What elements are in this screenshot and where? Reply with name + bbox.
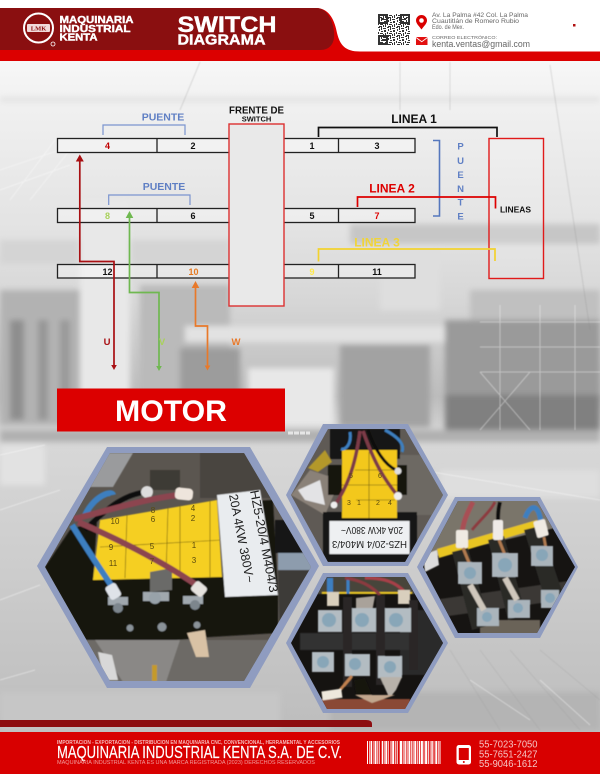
terminal numbers: 6	[190, 211, 196, 221]
label on switch: 20A 4KW 380V~	[226, 493, 257, 584]
company name: MAQUINARIA	[60, 15, 134, 26]
label on switch: HZ5-20/4 M404/3	[247, 489, 281, 594]
photo hexagon: terminals front view	[286, 573, 448, 713]
terminal row 2	[58, 208, 415, 222]
photo hexagon: switch side view: 9	[109, 543, 114, 552]
photo hexagon: switch side view: 7	[150, 557, 155, 566]
photo hexagon: switch side view: 11	[109, 559, 118, 568]
barcode	[367, 741, 442, 764]
terminal numbers: 8	[105, 211, 110, 221]
label: lineas: LINEAS	[500, 204, 531, 214]
terminal numbers: 10	[188, 267, 199, 277]
photo hexagon: switch front view: 5	[349, 473, 353, 480]
icon: phone	[456, 745, 471, 764]
photo hexagon: switch side view: 3	[192, 556, 197, 565]
bridge bracket vertical: N	[457, 184, 464, 195]
red stripe	[0, 8, 600, 61]
icon: location pin	[416, 15, 427, 30]
bridge bracket 2: PUENTE	[143, 181, 185, 193]
line 1 connector: LINEA 1	[391, 112, 437, 126]
panel: switch front	[229, 124, 284, 306]
arrow: W	[192, 281, 241, 370]
bridge bracket 1: PUENTE	[142, 112, 184, 124]
email	[432, 34, 530, 49]
heading: frente de switch: SWITCH	[242, 115, 271, 124]
terminal numbers: 9	[309, 267, 315, 277]
company name: KENTA	[60, 32, 98, 44]
address: Av. La Palma #42 Col. La Palma	[432, 13, 529, 19]
photo hexagon: switch side view: 10	[111, 517, 120, 526]
photo hexagon: switch front view: 2	[376, 500, 380, 507]
terminal numbers: 4	[105, 141, 110, 151]
terminal numbers: 11	[372, 267, 382, 277]
photo hexagon: switch front view	[285, 424, 450, 566]
footer band	[0, 732, 600, 774]
terminal row 3	[58, 264, 415, 278]
title	[178, 12, 276, 48]
address: Edo. de Mex.	[432, 25, 464, 31]
terminal numbers: 1	[309, 141, 315, 151]
icon: envelope	[416, 37, 428, 45]
photo hexagon: switch front view: 1	[357, 500, 361, 507]
photo hexagon: switch front view: 3	[347, 500, 351, 507]
title: DIAGRAMA	[178, 32, 266, 48]
photo hexagon: switch side view: 6	[151, 515, 156, 524]
bridge bracket vertical: T	[458, 198, 464, 208]
address	[432, 13, 529, 31]
dark red tab	[0, 8, 334, 50]
email: kenta.ventas@gmail.com	[432, 39, 530, 49]
banner: motor	[57, 388, 285, 432]
label on switch	[229, 490, 278, 592]
title: SWITCH	[178, 12, 276, 37]
bridge bracket vertical: E	[457, 212, 464, 222]
email: CORREO ELECTRÓNICO:	[432, 34, 497, 41]
photo hexagon: switch side view	[37, 447, 320, 688]
line 3 connector	[318, 236, 495, 262]
arrow: V: V	[159, 337, 166, 348]
terminal numbers: 12	[102, 267, 113, 277]
photo hexagon: terminals diagonal view	[417, 497, 580, 638]
photo hexagon: switch front view: 6	[378, 473, 382, 480]
bridge bracket 1	[103, 112, 185, 135]
terminal row 1	[58, 138, 415, 152]
photo hexagon: switch side view: 2	[191, 514, 196, 523]
bridge bracket 2	[109, 181, 190, 205]
phone numbers	[479, 740, 538, 770]
label on switch: HZ5-20/4 M404/3	[332, 538, 407, 550]
arrow: U: U	[104, 337, 111, 348]
arrow: U	[76, 154, 117, 370]
line 2 connector: LINEA 2	[369, 182, 415, 196]
terminal numbers: 7	[374, 211, 380, 221]
company name	[60, 15, 134, 44]
heading: frente de switch: FRENTE DE	[229, 106, 284, 116]
label on switch: 20A 4KW 380V~	[341, 524, 403, 536]
photo hexagon: switch side view: 5	[150, 542, 155, 551]
icon: company logo: LMK	[31, 26, 46, 32]
terminal numbers: 5	[309, 211, 315, 221]
photo hexagon: switch side view: 1	[192, 541, 197, 550]
address: Cuautitlán de Romero Rubio	[432, 19, 520, 25]
footer tagline: IMPORTACION - EXPORTACION - DISTRIBUCION EN MAQUINARIA CNC, CONVENCIONAL, HERRAMENTAL Y ACCESORIOS	[57, 740, 341, 746]
photo hexagon: switch front view: 4	[388, 500, 392, 507]
photo hexagon: switch side view: 4	[191, 504, 196, 513]
header: dark red band with logo, title and contact	[0, 8, 600, 61]
footer legal line: MAQUINARIA INDUSTRIAL KENTA ES UNA MARCA REGISTRADA (2023) DERECHOS RESERVADOS	[57, 760, 316, 766]
panel: lineas box	[489, 138, 544, 278]
terminal numbers: 3	[374, 141, 380, 151]
label on switch	[332, 527, 406, 548]
footer company name: MAQUINARIA INDUSTRIAL KENTA S.A. DE C.V.	[57, 742, 342, 762]
line 2 connector	[358, 182, 496, 208]
company name: INDUSTRIAL	[60, 24, 130, 35]
terminal numbers	[102, 141, 382, 277]
banner: motor: MOTOR	[115, 395, 227, 428]
bridge bracket vertical: P	[457, 142, 464, 152]
heading: frente de switch	[229, 106, 284, 124]
bridge bracket vertical: E	[457, 170, 464, 181]
bridge bracket vertical: U	[457, 156, 464, 167]
phone numbers: 55-9046-1612	[479, 759, 538, 770]
wiring diagram	[58, 106, 544, 371]
bridge bracket vertical	[433, 140, 464, 222]
QR code	[378, 14, 410, 45]
terminal numbers: 2	[190, 141, 196, 151]
icon: company logo	[24, 14, 55, 46]
phone numbers: 55-7023-7050	[479, 740, 538, 750]
dark red footer accent	[0, 720, 372, 727]
line 1 connector	[318, 112, 497, 137]
phone numbers: 55-7651-2427	[479, 750, 538, 760]
line 3 connector: LINEA 3	[354, 236, 400, 250]
arrow: W: W	[232, 337, 241, 348]
arrow: V	[126, 211, 166, 371]
photo hexagon: switch side view: 8	[151, 506, 156, 515]
